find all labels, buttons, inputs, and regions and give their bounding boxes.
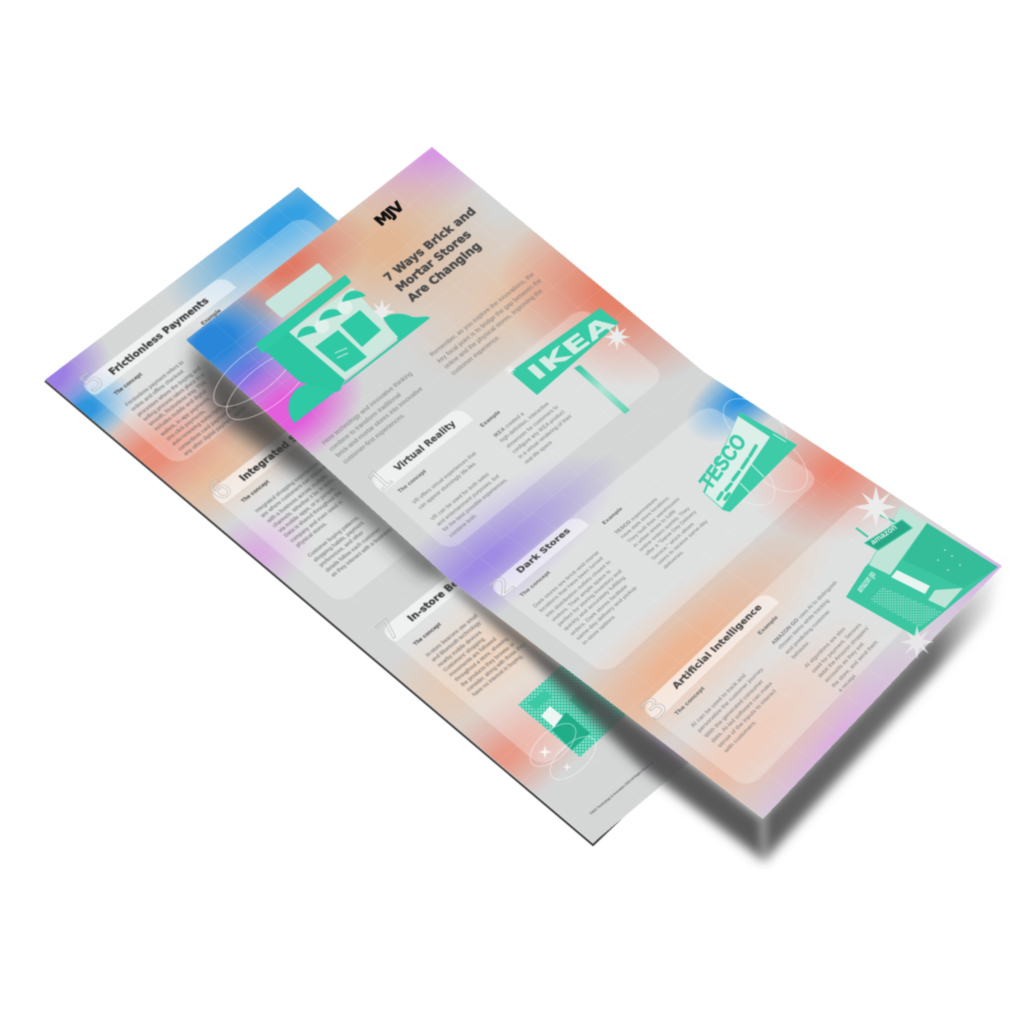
text: integrated concept: preferences, and other [318,530,365,568]
title: 7 Ways Brick and [381,206,479,284]
text: dark stores concept: quickly and accurately fulfilling [562,576,627,632]
label: vr example: Example [478,409,502,428]
store awning scallops [297,291,366,338]
icon: amazon stars [855,486,934,659]
number 7: 7 [370,614,409,646]
text: integrated concept [253,461,394,578]
text: vr concept: and entertainment purposes, but [435,473,501,527]
tab: integrated heading strip [208,382,363,505]
text: dark stores concept: perfect for storing inventory and [556,569,623,627]
panel: in-store beacons [380,460,752,768]
text: in-store concept: and Bluetooth technology [430,620,482,663]
text: integrated concept: with a business across multiple [265,473,329,523]
text: vr concept: VR can be used for both sales [429,471,490,522]
text: frictionless concept: any other digital payment option. [182,404,249,457]
text: vr example: in a virtual rendering of their [517,414,574,460]
text: ai example: the store, and send them [830,639,879,688]
text: in-store concept: consider, along with those they [465,641,527,692]
text: intro left: brick-and-mortar stores into innovative [335,386,425,459]
text: frictionless concept: smooth, frictionless way. This [147,380,208,427]
text: integrated concept: shopping habits, payment [312,520,365,563]
label: vr concept: The concept [396,468,428,494]
text: frictionless concept: auto-renewing subscriptions, [170,400,230,447]
text: integrated concept: Data is shared throughout the [283,490,344,538]
text: dark stores concept [532,550,638,646]
text: integrated concept: physical stores. [294,521,329,548]
tab: dark stores heading strip [488,515,589,598]
image: tesco sign: TESCO [694,429,751,494]
text: in-store concept [424,613,527,697]
heading: frictionless payments: Frictionless Payments [106,296,211,377]
heading: in-store beacons: In-store Beacons [405,558,486,624]
store window [340,310,381,347]
text: vr example: showroom for customers to [505,404,560,449]
number 2: 2 [482,571,523,603]
text: integrated concept: company and even used in [288,499,344,543]
panel: integrated shopping [208,320,559,605]
text: in-store concept: In-store beacons use small [424,613,479,658]
label: integrated concept: The concept [240,479,271,504]
number 6: 6 [201,474,240,506]
image: tesco sign [694,412,797,512]
text: dark stores concept: into distribution outlets closed to [544,559,612,618]
store awning bar [257,276,350,352]
tab: in-store heading strip [380,519,533,643]
text: dark stores concept: orders. Dark stores facilitate [569,584,629,636]
label: dark stores example: Example [601,506,624,525]
text: vr concept: for the best possible experiences, [441,477,509,533]
text: vr concept: combine both. [448,512,479,538]
text: dark stores example: deliveries. [662,550,686,570]
text: frictionless concept: selling process takes place in a [141,372,206,422]
text: ai example: AMAZON GO uses AI to distinguish [770,580,839,646]
heading: dark stores: Dark Stores [514,527,573,575]
text: ai concept: with customers. [723,720,758,754]
image: amazon go store [846,507,998,636]
text: ai example: used for payment. Sensors [810,622,863,674]
text: integrated concept: Customer buying patterns, [306,514,361,558]
text: ai concept: data, AI-led software can make [709,681,774,744]
text: frictionless concept: one-click payments, [164,408,207,442]
text: dark stores example: users to receive same-day [656,519,709,565]
text: intro right: online and the physical stores, improving the [443,288,545,370]
store sign [268,266,330,315]
logo: MJV: MJV [370,199,407,229]
text: integrated concept: Integrated shopping experiences [253,461,320,514]
text: ai example [770,580,879,693]
text: frictionless concept [124,360,249,457]
number 3: 3 [633,691,675,726]
text: ai concept: personalize the customer journey. [696,666,766,734]
text: ai concept: AI can be used to track and [689,673,747,729]
text: ai example: accounts as they exit [823,642,866,684]
text: vr concept: can appear stunningly life-like. [417,460,478,511]
text: vr example: real-life space [523,440,554,465]
text: integrated concept: channels. Whether it be in store, [271,476,337,528]
panel: dark stores [488,403,821,676]
text: dark stores example: in urban areas to fulfill [632,509,677,548]
store green wall [258,330,345,392]
text: intro right: key focal point is to bridge the gap between the [436,278,543,364]
text: ai example: debit the Amazon shoppers' [817,625,871,679]
heading: integrated: Integrated Shopping [237,405,336,483]
text: frictionless concept: processes where the buying and [135,365,202,417]
store ground and mounds [289,314,430,423]
title: Mortar Stores [393,229,474,294]
text: vr example: high-definition, interactive [498,401,550,444]
title: Are Changing [405,240,485,304]
text: dark stores concept: visitors. Their ample space is [550,569,612,622]
text: ai concept [689,666,778,754]
text: dark stores example [614,495,709,570]
image: ikea sign [504,308,630,414]
text: vr concept: VR offers virtual experiences that [411,451,478,505]
label: dark stores concept: The concept [518,570,552,598]
panel: virtual reality [368,306,666,553]
text: in-store concept: throughout a store, showing [453,636,510,682]
panel: artificial intelligence [640,500,963,790]
label: in-store concept: The concept [412,621,443,647]
text: vr example: configure any IKEA product [511,409,566,454]
text: dark stores concept: in-store options [581,615,616,646]
image: amazon go store: amazon [868,522,899,546]
text: frictionless concept: includes mobile and digital [153,389,208,432]
text: in-store concept: the products they browse or [459,641,516,687]
text: integrated concept: details follow each customer [323,526,382,573]
text: ai example: chosen items while tracking [777,598,831,650]
panel: frictionless payments [79,214,398,467]
text: vr example: IKEA created a [492,411,525,438]
text: dark stores example: online orders quickly. They [638,506,691,552]
tab: ai heading strip [640,591,779,721]
text: ai concept: sense of the inputs to interact [716,688,778,749]
label: ai concept: The concept [673,685,706,716]
store light panel [289,287,398,380]
text: vr concept [411,451,509,538]
heading: virtual reality: Virtual Reality [392,419,458,473]
store star [368,298,396,326]
text: ai example: and predicting customer [783,609,831,655]
text: in-store concept: have no interest in buying. [471,653,525,697]
text: frictionless concept: online and offline checkout [129,369,185,412]
label: the concept: The concept [112,372,144,396]
text: ai example: a receipt. [837,672,858,693]
image: amazon go store: amazon go [855,569,878,595]
text: dark stores example: have dark store locations. [620,495,671,539]
label: ai example: Example [756,615,779,636]
footer: copyright: ©MJV Technology & Innovation 2023 All Rights Reserved [589,761,654,816]
text: intro right: customer experience. [450,334,502,377]
text: dark stores example: offer a "Same Day Delivery [644,510,698,557]
number 5: 5 [73,366,112,398]
tab: frictionless heading strip [79,275,236,397]
sheet: front page, upper section [186,146,704,580]
text: in-store concept: nearby mobile devices. [436,629,484,668]
text: in-store concept: Customers' shopping [442,636,486,673]
text: frictionless concept: Frictionless payment refers to [124,360,185,407]
text: frictionless concept: contactless card payments, or [176,403,238,452]
text: integrated concept: as they interact with a business. [329,526,394,578]
heading: artificial intelligence: Artificial Intelligence [670,603,764,691]
number 1: 1 [361,463,400,497]
text: integrated concept: via mobile apps, or in person. [277,485,337,533]
text: ai concept: With the generated consumer [703,679,765,739]
text: intro right: Remember, as you explore the innovations, the [428,272,536,358]
text: ai example: AI algorithms are also [803,627,847,669]
text: integrated concept: are where customers can interact [259,465,327,519]
sheet: front page, lower section [450,372,1002,820]
text: dark stores concept: Dark stores are brick-and-mortar [532,550,601,609]
decoration: tesco ovals [705,388,818,516]
tab: vr heading strip [368,406,473,493]
text: frictionless concept: wallets, in-app payments, [159,395,212,437]
store door [315,330,367,372]
text: intro left: customer-first experiences. [342,412,407,465]
sheet: back page [45,187,835,843]
text: ai example: behavior. [790,640,811,660]
image: ikea sign: IKEA [521,311,620,385]
text: dark stores example: Service," which allows [650,522,695,561]
text: intro left: combine to transform traditional [328,392,403,453]
text: intro left: Here technology and innovative thinking [320,371,414,446]
decoration: ovals near store [203,325,320,432]
text: vr example [492,401,574,465]
text: dark stores concept: same-day delivery and pickup [575,585,638,641]
illustration: store [257,266,430,423]
text: dark stores example: They built their warehouses [626,497,681,544]
text: in-store concept: movements are followed [447,636,498,678]
text: dark stores example: TESCO supermarkets [614,497,659,535]
text: dark stores concept: locations that have been turned [538,556,605,613]
label: example: Example [199,308,223,326]
